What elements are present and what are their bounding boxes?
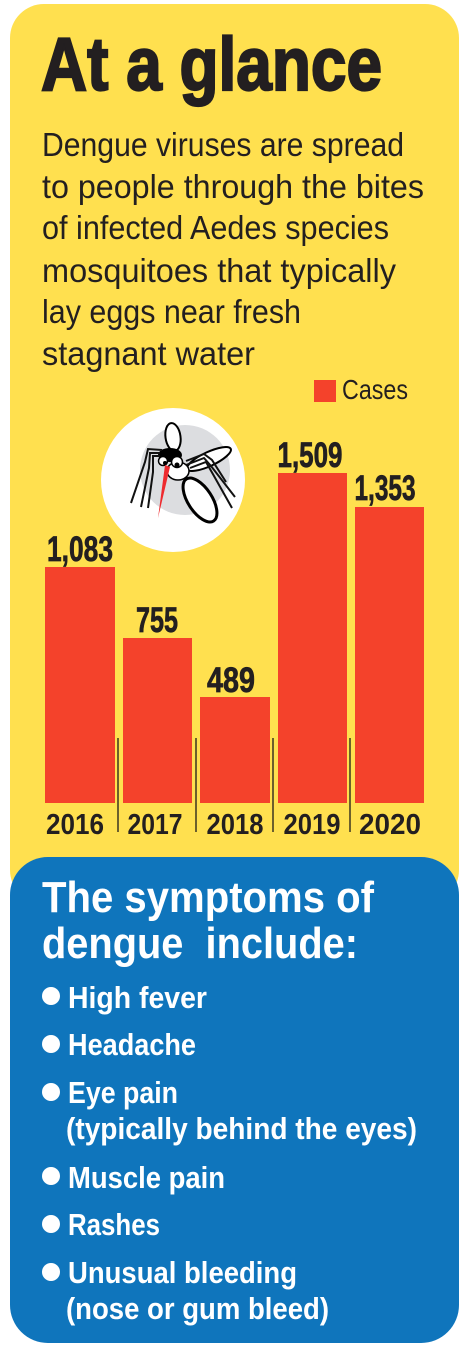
- symptom list: Muscle pain: [68, 1160, 225, 1195]
- bar 2019: [278, 436, 347, 841]
- bar 2018: 2018: [206, 809, 264, 841]
- symptom list: Rashes: [68, 1207, 160, 1242]
- bar chart: [45, 436, 424, 841]
- intro text: Dengue viruses are spread: [42, 126, 404, 163]
- bar 2019: 1,509: [278, 436, 342, 475]
- heading: symptoms: [42, 873, 374, 968]
- intro text: mosquitoes that typically: [42, 252, 396, 289]
- legend: cases: Cases: [342, 374, 408, 405]
- bar 2020: 2020: [359, 809, 421, 841]
- symptom list: High fever: [68, 980, 207, 1015]
- bar 2019: 2019: [284, 809, 340, 841]
- heading: symptoms: dengue include:: [42, 919, 358, 968]
- bar 2017: [123, 601, 192, 841]
- intro text: lay eggs near fresh: [42, 293, 301, 330]
- bar 2020: [354, 469, 424, 841]
- bar 2018: 489: [207, 661, 255, 700]
- panel: symptoms: [10, 857, 459, 1343]
- bar 2016: 1,083: [47, 530, 113, 569]
- intro text: to people through the bites: [42, 168, 424, 205]
- intro text: [42, 126, 424, 372]
- bar 2016: 2016: [46, 809, 104, 841]
- title: At a glance: [41, 22, 382, 106]
- heading: symptoms: The symptoms of: [42, 873, 374, 922]
- bar 2017: 755: [136, 601, 178, 640]
- bar 2016: [45, 530, 115, 841]
- intro text: of infected Aedes species: [42, 209, 389, 246]
- bar 2020: 1,353: [354, 469, 416, 508]
- intro text: stagnant water: [42, 335, 255, 372]
- bar 2017: 2017: [128, 809, 182, 841]
- symptom list: (typically behind the eyes): [66, 1111, 417, 1146]
- icon: mosquito: [101, 408, 245, 552]
- symptom list: Eye pain: [68, 1075, 178, 1110]
- symptom list: [42, 980, 417, 1326]
- symptom list: (nose or gum bleed): [66, 1291, 329, 1326]
- symptom list: Headache: [68, 1027, 196, 1062]
- legend: cases: [314, 374, 408, 405]
- panel: yellow background: [10, 4, 459, 904]
- bar 2018: [200, 661, 270, 841]
- symptom list: Unusual bleeding: [68, 1255, 297, 1290]
